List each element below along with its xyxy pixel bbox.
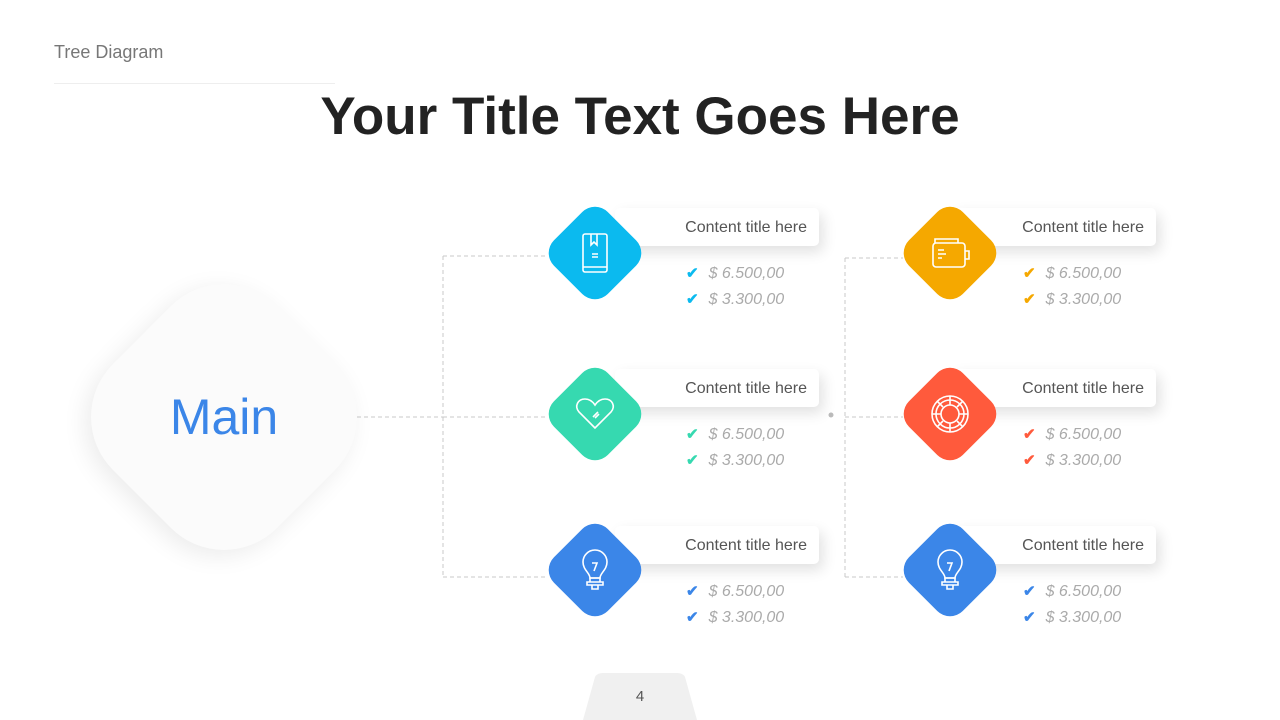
title: Your Title Text Goes Here <box>320 87 960 146</box>
text: ✔ $ 6.500,00 <box>1023 265 1121 282</box>
text: ✔ $ 3.300,00 <box>686 609 784 626</box>
text: ✔ $ 6.500,00 <box>1023 426 1121 443</box>
text: Content title here <box>1022 380 1144 397</box>
text: ✔ $ 3.300,00 <box>1023 452 1121 469</box>
text: Content title here <box>685 537 807 554</box>
item: right 2 <box>904 368 1164 469</box>
text: ✔ $ 3.300,00 <box>1023 291 1121 308</box>
text: Content title here <box>1022 219 1144 236</box>
text: ✔ $ 3.300,00 <box>1023 609 1121 626</box>
header label: Tree Diagram <box>54 42 163 62</box>
text: ✔ $ 6.500,00 <box>1023 583 1121 600</box>
text: ✔ $ 3.300,00 <box>686 452 784 469</box>
text: ✔ $ 3.300,00 <box>686 291 784 308</box>
page number tab: 4 <box>636 688 644 705</box>
text: Content title here <box>685 219 807 236</box>
item: right 3 <box>904 524 1164 626</box>
text: ✔ $ 6.500,00 <box>686 265 784 282</box>
item: left 2 <box>548 368 827 469</box>
text: ✔ $ 6.500,00 <box>686 426 784 443</box>
item: left 1 <box>548 206 827 308</box>
text: Content title here <box>1022 537 1144 554</box>
page number tab <box>583 673 697 720</box>
item: left 3 <box>548 524 827 626</box>
main label: Main <box>170 389 278 445</box>
text: ✔ $ 6.500,00 <box>686 583 784 600</box>
text: Content title here <box>685 380 807 397</box>
main diamond <box>60 253 388 581</box>
item: right 1 <box>904 206 1164 308</box>
